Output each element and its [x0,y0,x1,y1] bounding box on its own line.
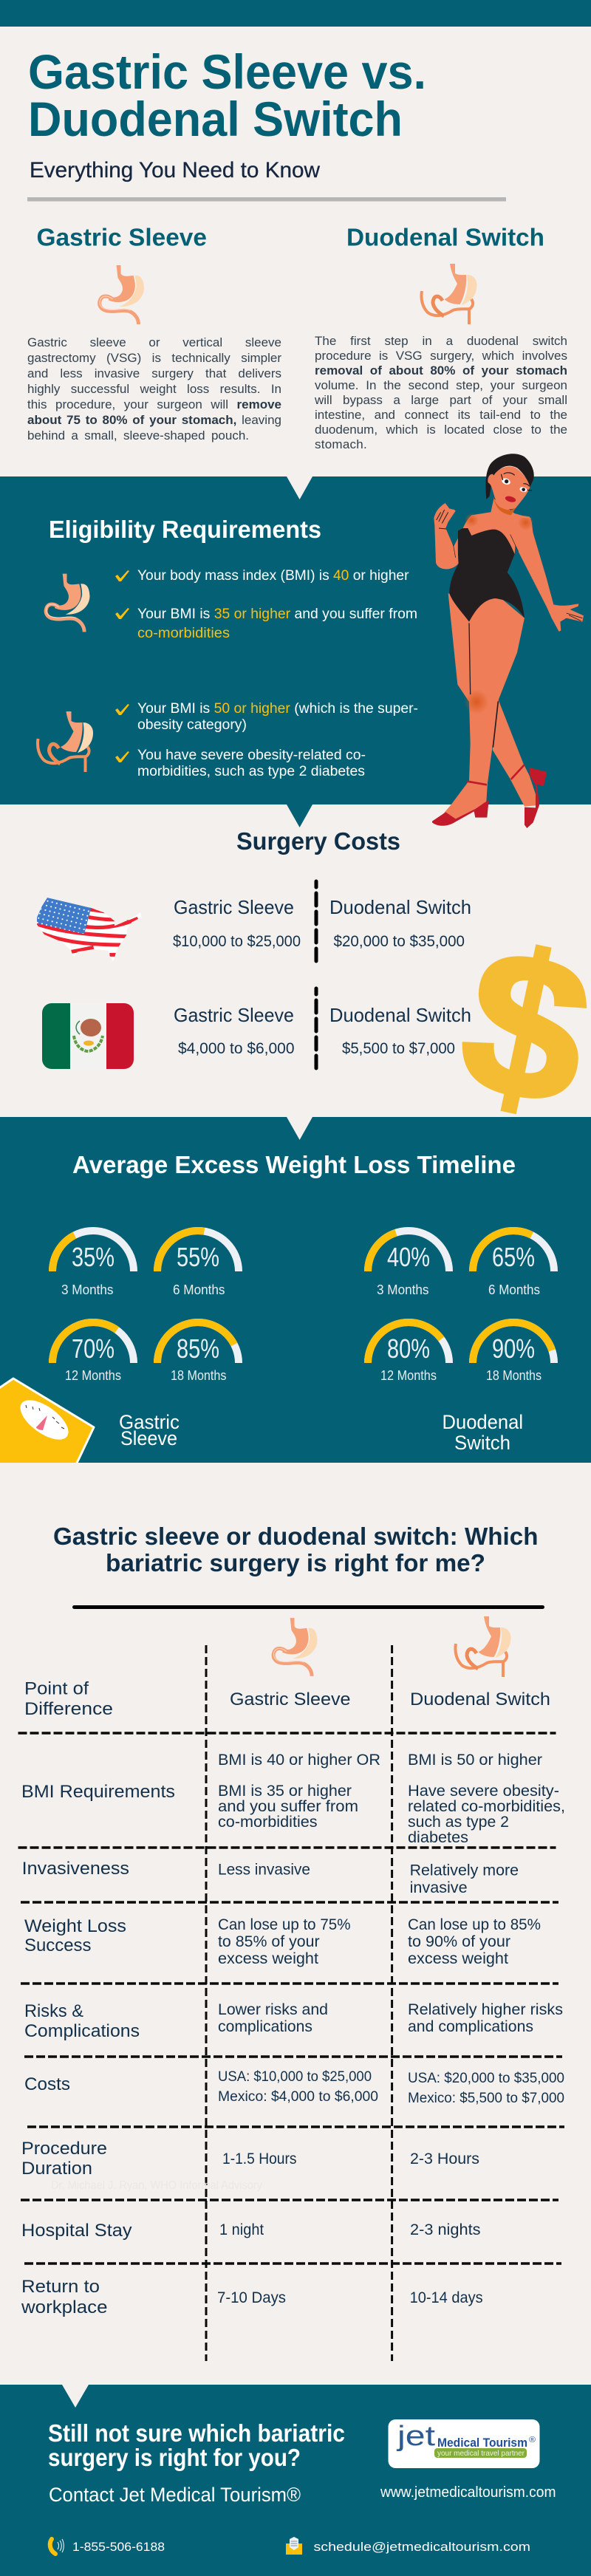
row: risks and complications: Risks & [24,2001,83,2021]
gauge: 70% at 12 months: 12 Months [65,1368,121,1383]
row: procedure duration [21,2139,479,2192]
row: USA costs [173,881,471,961]
row: weight loss success: Can lose up to 75% [218,1916,350,1933]
row: risks and complications: and complications [408,2018,533,2035]
text block: duodenal switch description: duodenum, which is located close to the [315,423,567,437]
website: www.jetmedicaltourism.com [380,2484,556,2501]
gauge: 90% at 18 months: 90% [492,1333,535,1364]
row: BMI requirements: BMI is 35 or higher [218,1783,352,1800]
item: BMI 35: co-morbidities [137,626,230,641]
row: Mexico costs: $4,000 to $6,000 [178,1040,294,1057]
heading: duodenal switch: Duodenal Switch [346,225,544,251]
gauge: 80% at 12 months: 80% [387,1333,430,1364]
row: invasiveness: Relatively more [410,1862,519,1879]
row: BMI requirements: BMI Requirements [21,1782,175,1802]
heading: comparison question [53,1523,538,1576]
text block: gastric sleeve description: about 75 to 80% of your stomach, leaving [27,413,281,427]
body [432,503,584,828]
gauge: 90% at 18 months: 18 Months [486,1368,542,1383]
phone number: 1-855-506-6188 [72,2541,165,2554]
item: co-morbidities: morbidities, such as type 2 diabetes [137,764,365,779]
row: return to workplace: 7-10 Days [217,2289,286,2306]
row: BMI requirements: BMI is 50 or higher [408,1752,542,1769]
head [473,454,534,519]
label: duodenal switch [442,1411,523,1454]
gauge: 65% at 6 months [473,1231,554,1297]
row: BMI requirements: related co-morbidities, [408,1798,565,1815]
gauge: 70% at 12 months [52,1322,134,1383]
gauge: 35% at 3 months: 3 Months [61,1282,114,1297]
row: invasiveness [22,1859,519,1896]
gauge: 85% at 18 months [157,1322,239,1383]
text block: gastric sleeve description: behind a small, sleeve-shaped pouch. [27,428,249,443]
row: costs: Mexico: $5,500 to $7,000 [408,2090,564,2106]
row: header: Point of [24,1678,89,1699]
logo: ® [529,2436,536,2445]
item: BMI 50: obesity category) [137,717,247,733]
text block: duodenal switch description: procedure is VSG surgery, which involves [315,349,567,363]
icon: email [286,2537,302,2555]
row: risks and complications: Relatively higher risks [408,2001,563,2018]
row: weight loss success: excess weight [218,1950,318,1967]
icon: weighing scale [0,1377,95,1463]
row: return to workplace: 10-14 days [410,2289,483,2306]
gauge: 80% at 12 months: 12 Months [380,1368,437,1383]
icon: gastric sleeve stomach [100,265,144,324]
row: costs: USA: $10,000 to $25,000 [218,2068,372,2085]
gauge: 70% at 12 months: 70% [72,1333,115,1364]
row: hospital stay: Hospital Stay [21,2221,132,2241]
icon: switch stomach [38,711,93,772]
row: weight loss success: Can lose up to 85% [408,1916,541,1933]
call to action [48,2419,345,2471]
label: gastric sleeve: Gastric [119,1411,180,1433]
row: hospital stay: 2-3 nights [410,2221,480,2238]
call to action: Still not sure which bariatric [48,2419,345,2447]
row: invasiveness: invasive [410,1879,468,1896]
row: BMI requirements [21,1752,565,1846]
heading: gastric sleeve: Gastric Sleeve [37,225,207,251]
gauge: 80% at 12 months [368,1322,449,1383]
label: duodenal switch: Switch [454,1432,510,1454]
row: weight loss success: Success [24,1936,92,1955]
text block: duodenal switch description: will bypass a large part of your small [315,393,567,407]
gauge: 90% at 18 months [473,1322,554,1383]
item: BMI 35: Your BMI is 35 or higher and you suffer from [137,607,417,622]
row: procedure duration: 2-3 Hours [410,2150,479,2167]
item: BMI 50 [115,701,418,733]
row: procedure duration: Duration [21,2159,92,2179]
row: Mexico costs [174,988,471,1068]
text block: gastric sleeve description: and less invasive surgery that delivers [27,366,281,380]
heading: eligibility: Eligibility Requirements [49,516,321,543]
row: return to workplace: workplace [21,2297,108,2317]
gauge: 85% at 18 months: 18 Months [171,1368,226,1383]
gauges: duodenal switch [368,1231,554,1383]
row: header: Duodenal Switch [410,1690,550,1709]
text block: duodenal switch description [315,334,567,451]
gauge: 55% at 6 months: 55% [177,1242,219,1272]
row: BMI requirements: and you suffer from [218,1798,358,1815]
panel: eligibility requirements [0,476,591,827]
text block: gastric sleeve description: Gastric sleeve or vertical sleeve [27,335,281,349]
heading: surgery costs: Surgery Costs [236,827,400,855]
gauge: 35% at 3 months: 35% [72,1242,115,1272]
row: invasiveness: Invasiveness [22,1859,129,1879]
row: procedure duration: Procedure [21,2139,107,2159]
row: weight loss success: to 85% of your [218,1933,320,1950]
heading: timeline: Average Excess Weight Loss Timeline [72,1151,516,1178]
gauge: 40% at 3 months: 40% [387,1242,430,1272]
item: co-morbidities: You have severe obesity-related co- [137,748,366,763]
row: header [24,1678,550,1719]
row: hospital stay: 1 night [219,2221,264,2238]
item: BMI 40: Your body mass index (BMI) is 40 or higher [137,568,409,584]
row: BMI requirements: Have severe obesity- [408,1783,559,1800]
gauge: 35% at 3 months [52,1231,134,1297]
gauge: 55% at 6 months: 6 Months [173,1282,225,1297]
row: risks and complications: Complications [24,2021,140,2041]
icon: Mexico flag [42,1003,134,1069]
row: risks and complications: Lower risks and [218,2001,328,2018]
icon: phone [50,2539,64,2554]
gauges: gastric sleeve [52,1231,239,1383]
row: invasiveness: Less invasive [218,1862,310,1878]
gauge: 65% at 6 months: 65% [492,1242,535,1272]
row: Mexico costs: Gastric Sleeve [174,1004,294,1026]
row: BMI requirements: such as type 2 [408,1814,509,1831]
row: Mexico costs: Duodenal Switch [329,1004,471,1026]
icon: duodenal switch stomach [421,264,477,324]
row: Mexico costs: $5,500 to $7,000 [342,1040,455,1057]
logo: Medical Tourism [437,2436,527,2450]
row: costs [24,2068,564,2106]
text block: duodenal switch description: stomach. [315,437,367,451]
label: gastric sleeve [119,1411,180,1449]
row: USA costs: $10,000 to $25,000 [173,933,301,950]
panel: surgery costs [30,827,471,1069]
row: risks and complications: complications [218,2018,312,2035]
title: Gastric Sleeve vs. [28,44,426,99]
label: duodenal switch: Duodenal [442,1411,523,1433]
item: BMI 35 [115,607,417,641]
row: USA costs: $20,000 to $35,000 [334,933,465,950]
row: USA costs: Duodenal Switch [329,896,471,918]
icon: table switch [455,1616,511,1677]
title [28,44,426,146]
panel: contact footer [0,2385,591,2576]
row: return to workplace [21,2277,483,2317]
label: gastric sleeve: Sleeve [120,1427,177,1449]
row: hospital stay [21,2221,480,2241]
item: co-morbidities [115,748,366,779]
row: costs: USA: $20,000 to $35,000 [408,2070,564,2086]
logo: jet [397,2421,436,2452]
row: weight loss success [24,1916,541,1967]
row: BMI requirements: co-morbidities [218,1814,318,1831]
text block: duodenal switch description: The first step in a duodenal switch [315,334,567,348]
heading: comparison question: Gastric sleeve or duodenal switch: Which [53,1523,538,1550]
text block: duodenal switch description: removal of about 80% of your stomach [315,363,567,377]
panel: comparison table [18,1616,565,2361]
icon: sleeve stomach [46,574,90,632]
row: BMI requirements: diabetes [408,1829,468,1846]
text block: duodenal switch description: volume. In the second step, your surgeon [315,378,567,392]
logo [389,2419,539,2468]
gauge: 65% at 6 months: 6 Months [488,1282,540,1297]
row: weight loss success: excess weight [408,1950,508,1967]
row: BMI requirements: BMI is 40 or higher OR [218,1752,380,1769]
row: return to workplace: Return to [21,2277,100,2297]
contact line: Contact Jet Medical Tourism® [49,2484,301,2506]
call to action: surgery is right for you? [48,2444,301,2471]
row: procedure duration: Dr. Michael J. Ryan, WHO Informal Advisory [51,2179,262,2192]
top bar [0,0,591,27]
row: risks and complications [24,2001,563,2041]
row: costs: Costs [24,2074,70,2094]
heading: comparison question: bariatric surgery is right for me? [106,1549,485,1576]
icon: table sleeve [273,1618,318,1676]
text block: duodenal switch description: intestine, and connect its tail-end to the [315,408,567,422]
text block: gastric sleeve description: gastrectomy (VSG) is technically simpler [27,351,281,365]
email address: schedule@jetmedicaltourism.com [313,2540,530,2554]
illustration: woman [432,454,584,828]
subtitle: Everything You Need to Know [30,158,320,182]
gauge: 40% at 3 months: 3 Months [377,1282,428,1297]
gauge: 55% at 6 months [157,1231,239,1297]
row: header: Gastric Sleeve [230,1690,350,1709]
text block: gastric sleeve description: highly successful weight loss results. In [27,382,281,396]
row: USA costs: Gastric Sleeve [174,896,294,918]
row: weight loss success: to 90% of your [408,1933,510,1950]
icon: USA flag map [37,898,142,962]
gauge: 85% at 18 months: 85% [177,1333,219,1364]
text block: gastric sleeve description [27,335,281,443]
check list [115,568,418,779]
logo: your medical travel partner [437,2449,525,2458]
row: header: Difference [24,1699,113,1719]
item: BMI 50: Your BMI is 50 or higher (which is the super- [137,701,418,717]
row: procedure duration: 1-1.5 Hours [222,2150,297,2167]
row: weight loss success: Weight Loss [24,1916,126,1936]
gauge: 40% at 3 months [368,1231,449,1297]
text block: gastric sleeve description: this procedure, your surgeon will remove [27,397,281,411]
title: Duodenal Switch [28,92,403,146]
panel: weight loss timeline [0,1117,591,1485]
row: costs: Mexico: $4,000 to $6,000 [218,2088,378,2105]
